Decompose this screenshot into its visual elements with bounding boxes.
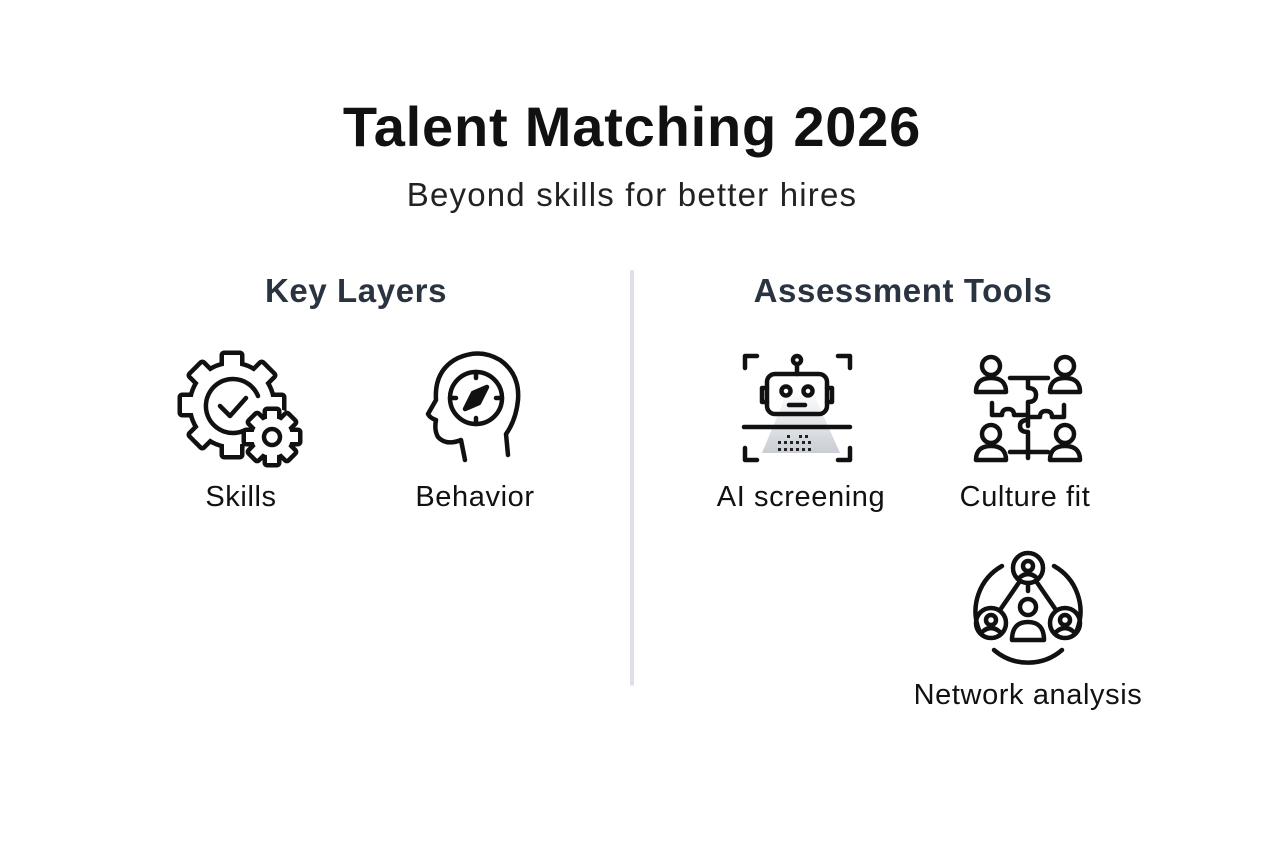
heading: assessment tools: Assessment Tools (754, 272, 1052, 309)
divider (630, 270, 634, 686)
icon: culture fit puzzle people (976, 357, 1080, 460)
subtitle: Beyond skills for better hires (407, 176, 857, 213)
heading: key layers: Key Layers (265, 272, 447, 309)
label: skills: Skills (205, 481, 277, 513)
title: Talent Matching 2026 (343, 95, 921, 158)
label: behavior: Behavior (415, 481, 535, 513)
icon: behavior head with compass (428, 353, 518, 460)
icon: AI screening robot (744, 356, 850, 460)
icon: network analysis (976, 553, 1080, 663)
label: network analysis: Network analysis (914, 679, 1142, 711)
label: culture fit: Culture fit (960, 481, 1090, 513)
label: AI screening: AI screening (717, 481, 885, 513)
icon: skills gears (182, 355, 298, 463)
